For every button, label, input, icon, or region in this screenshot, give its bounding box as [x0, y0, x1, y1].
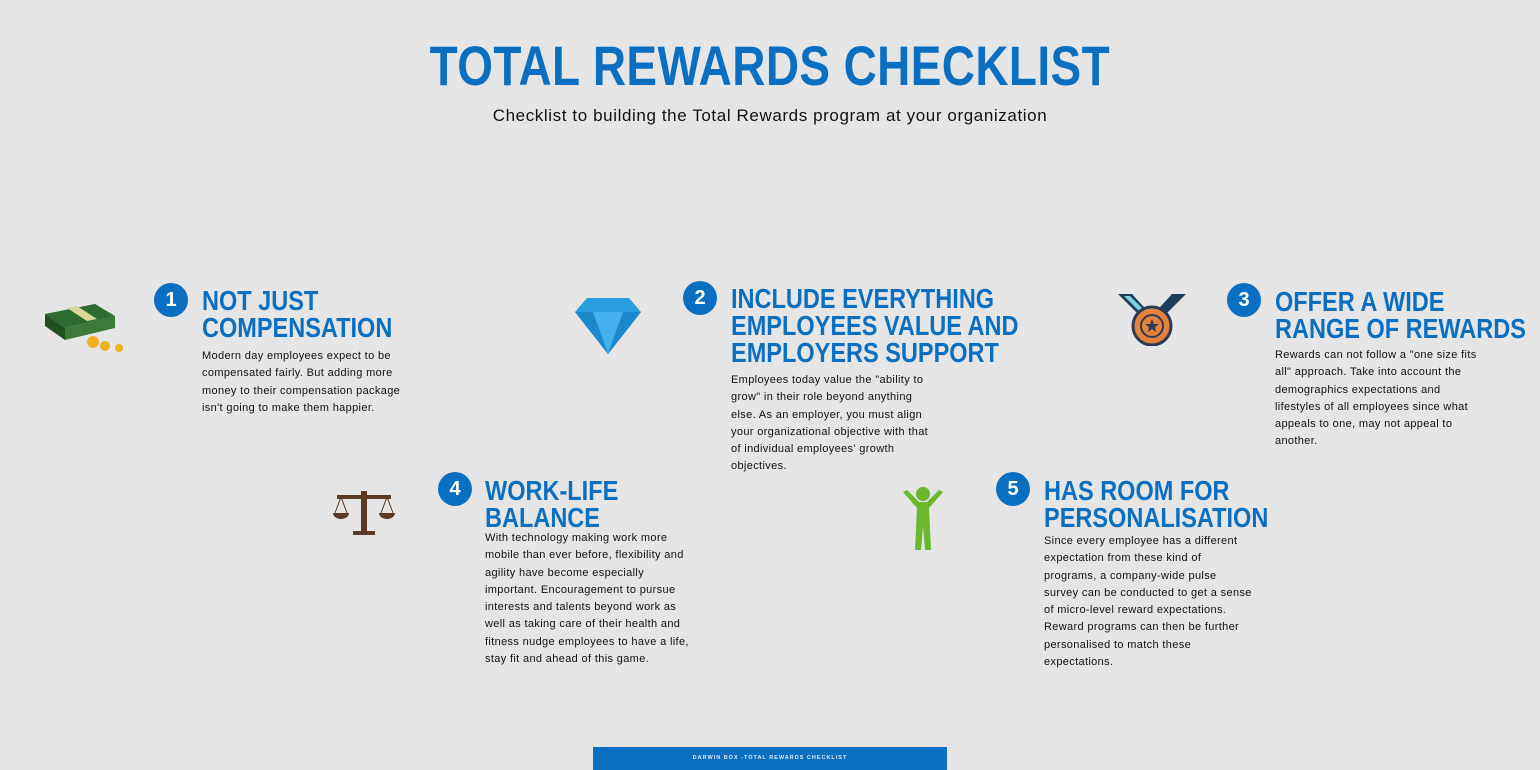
badge 1	[154, 283, 188, 317]
footer bar: DARWIN BOX -TOTAL REWARDS CHECKLIST	[693, 755, 847, 761]
heading 3	[1275, 286, 1526, 344]
badge 3	[1227, 283, 1261, 317]
icon: diamond	[575, 298, 641, 354]
heading 4	[485, 475, 618, 533]
badge 3: 3	[1238, 289, 1250, 311]
heading 1: COMPENSATION	[202, 312, 392, 343]
badge 2: 2	[694, 287, 706, 309]
subtitle: Checklist to building the Total Rewards program at your organization	[493, 106, 1047, 125]
item 1	[45, 283, 400, 414]
heading 2: EMPLOYEES VALUE AND	[731, 310, 1019, 341]
heading 1	[202, 285, 392, 343]
heading 5: HAS ROOM FOR	[1044, 475, 1230, 506]
badge 5	[996, 472, 1030, 506]
text 1: Modern day employees expect to be compensated fairly. But adding more money to their compensation package isn't going to make them happier.	[202, 350, 400, 414]
item 3	[1118, 283, 1526, 447]
badge 2	[683, 281, 717, 315]
icon: medal	[1118, 294, 1186, 346]
badge 4	[438, 472, 472, 506]
text 3: Rewards can not follow a "one size fits all" approach. Take into account the demographics expectations and lifestyles of all employees since what appeals to one, may not appeal to another.	[1275, 349, 1477, 447]
icon: money	[45, 304, 123, 352]
heading 2: EMPLOYERS SUPPORT	[731, 337, 999, 368]
heading 3: RANGE OF REWARDS	[1275, 313, 1526, 344]
text 2: Employees today value the "ability to grow" in their role beyond anything else. As an employer, you must align your organizational objective with that of individual employees' growth objectives.	[731, 374, 928, 472]
heading 4: BALANCE	[485, 502, 600, 533]
icon: scales	[333, 491, 395, 535]
text 5: Since every employee has a different expectation from these kind of programs, a company-wide pulse survey can be conducted to get a sense of micro-level reward expectations. Reward programs can then be further personalised to match these expectations.	[1044, 535, 1252, 668]
heading 5	[1044, 475, 1268, 533]
title: TOTAL REWARDS CHECKLIST	[430, 34, 1110, 97]
item 4	[333, 472, 689, 665]
heading 5: PERSONALISATION	[1044, 502, 1268, 533]
text 4: With technology making work more mobile than ever before, flexibility and agility have become especially important. Encouragement to pursue interests and talents beyond work as well as taking care of their health and fitness nudge employees to have a life, stay fit and ahead of this game.	[485, 532, 689, 665]
badge 1: 1	[165, 289, 177, 311]
item 2	[575, 281, 1019, 472]
heading 3: OFFER A WIDE	[1275, 286, 1444, 317]
badge 4: 4	[449, 478, 461, 500]
heading 4: WORK-LIFE	[485, 475, 618, 506]
icon: person	[903, 487, 943, 550]
heading 2	[731, 283, 1019, 368]
item 5	[903, 472, 1268, 668]
heading 1: NOT JUST	[202, 285, 318, 316]
heading 2: INCLUDE EVERYTHING	[731, 283, 994, 314]
badge 5: 5	[1007, 478, 1019, 500]
footer bar	[593, 747, 947, 770]
